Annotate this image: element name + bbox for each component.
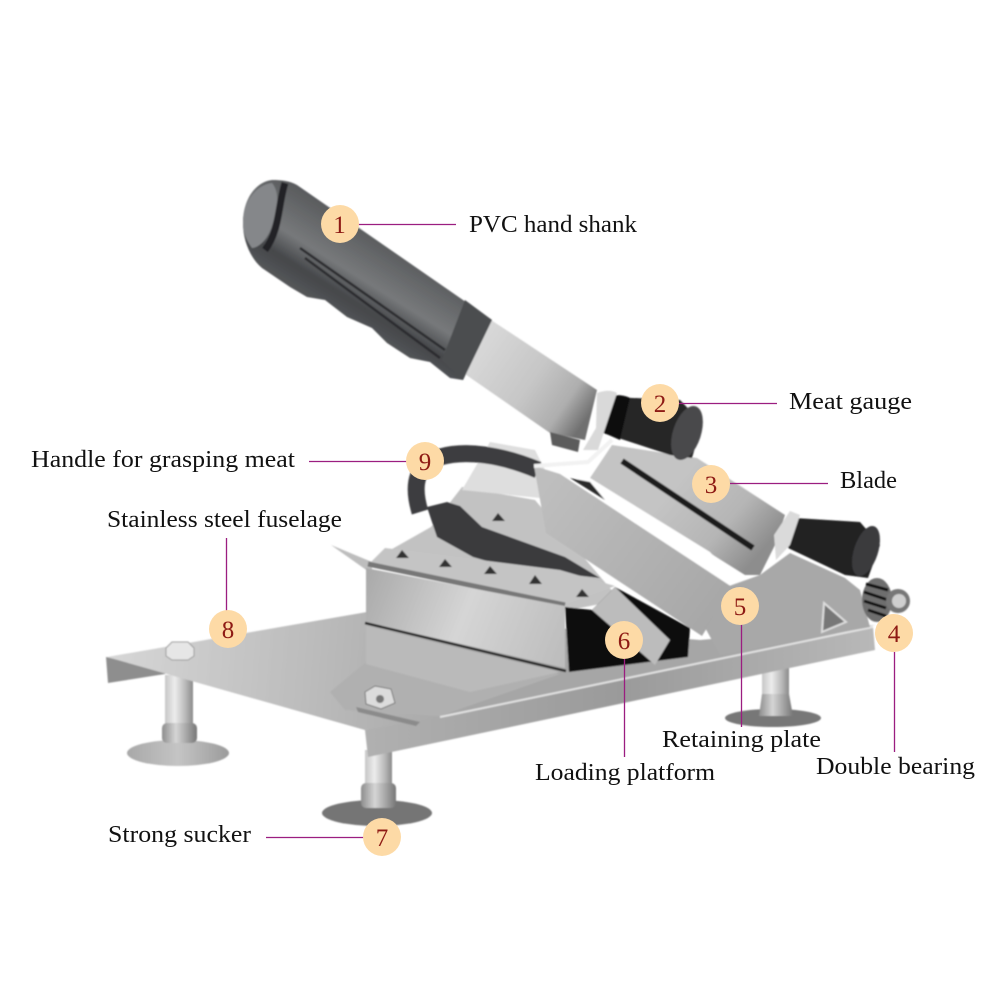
label: Handle for grasping meat: Handle for grasping meat xyxy=(31,447,295,473)
marker 8: 8 xyxy=(222,617,234,644)
marker 4 xyxy=(875,614,913,652)
label: Meat gauge: Meat gauge xyxy=(789,389,912,415)
marker 3: 3 xyxy=(705,472,717,499)
label: Retaining plate: Retaining plate xyxy=(662,727,821,753)
label: PVC hand shank: PVC hand shank xyxy=(469,212,637,238)
left flange xyxy=(106,657,168,683)
marker 7 xyxy=(363,818,401,856)
rear bracket xyxy=(690,553,870,655)
left foot xyxy=(127,675,229,766)
illustration: meat slicer xyxy=(106,180,910,826)
blade bar xyxy=(590,445,785,575)
retaining plate xyxy=(534,466,732,636)
marker 6: 6 xyxy=(618,628,630,655)
front rail xyxy=(365,627,875,757)
marker 2: 2 xyxy=(654,391,666,418)
marker 7: 7 xyxy=(376,825,388,852)
leader line 3 xyxy=(730,482,828,484)
marker 6 xyxy=(605,621,643,659)
leader line 4 xyxy=(894,652,896,752)
leader line 2 xyxy=(678,402,777,404)
handle for grasping meat xyxy=(416,454,600,578)
leader line 1 xyxy=(358,224,456,226)
loading platform: front panel xyxy=(366,568,565,668)
leader line 8 xyxy=(226,538,228,611)
marker 9: 9 xyxy=(419,449,431,476)
marker 1: 1 xyxy=(333,212,346,239)
double bearing xyxy=(862,578,910,622)
window behind plate xyxy=(565,470,735,590)
marker 8 xyxy=(209,610,247,648)
grip xyxy=(243,180,492,380)
shadow on base xyxy=(330,640,560,716)
marker 9 xyxy=(406,442,444,480)
base plate top xyxy=(107,612,875,730)
marker 5: 5 xyxy=(734,594,746,621)
leader line 5 xyxy=(740,625,742,727)
rear pushing plate xyxy=(385,487,620,610)
label: Strong sucker: Strong sucker xyxy=(108,822,251,848)
marker 4: 4 xyxy=(888,621,901,648)
knob near bearing xyxy=(774,511,885,579)
marker 2 xyxy=(641,384,679,422)
marker 3 xyxy=(692,465,730,503)
bolts on base xyxy=(166,611,790,726)
label: Double bearing: Double bearing xyxy=(816,754,975,780)
marker 1 xyxy=(321,205,359,243)
label: Stainless steel fuselage: Stainless steel fuselage xyxy=(107,507,342,533)
loading platform: flange and spikes xyxy=(331,513,615,605)
front foot xyxy=(322,750,432,826)
rear right foot xyxy=(725,660,821,727)
leader line 9 xyxy=(309,460,407,462)
label: Loading platform: Loading platform xyxy=(535,760,715,786)
knob near gauge xyxy=(583,391,709,464)
leader line 7 xyxy=(266,836,364,838)
shank xyxy=(462,318,597,440)
label: Blade: Blade xyxy=(840,468,897,494)
loading platform: black opening xyxy=(565,587,690,672)
marker 5 xyxy=(721,587,759,625)
leader line 6 xyxy=(624,659,626,757)
